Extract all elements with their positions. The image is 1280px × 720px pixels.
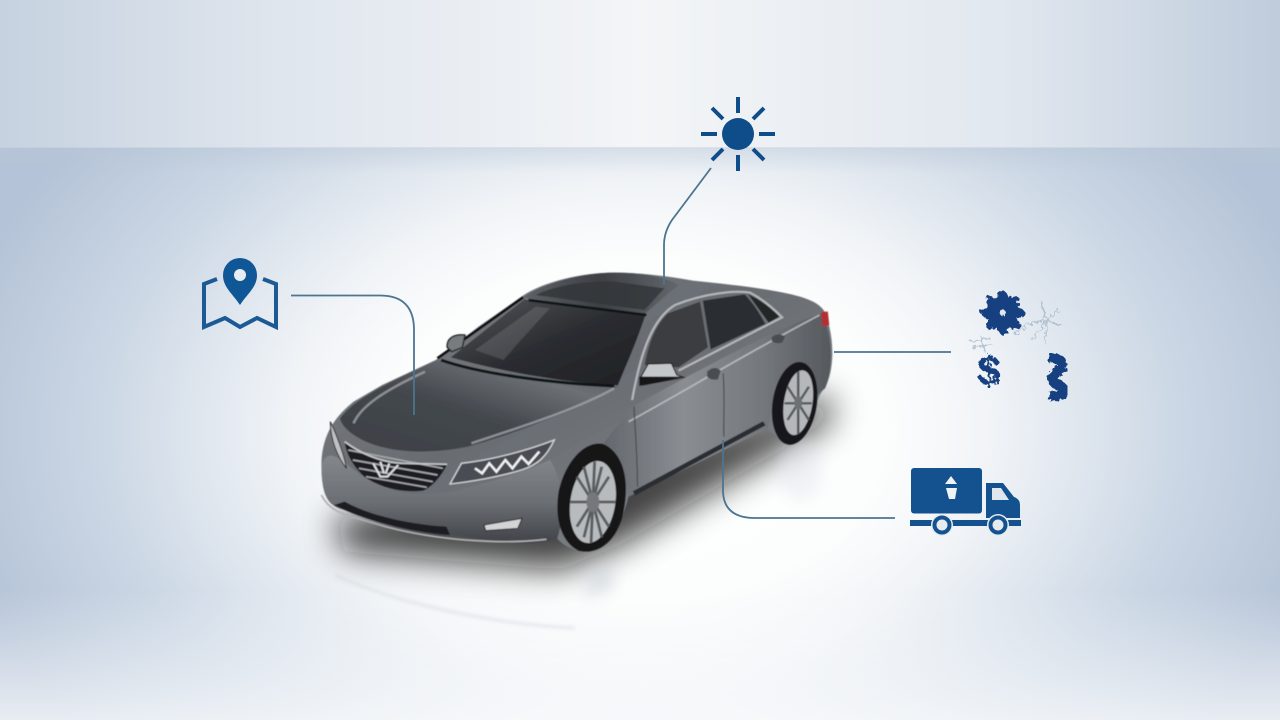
icon: scattered particles and dollar signs	[970, 291, 1064, 396]
particle cluster: dark	[981, 291, 1025, 335]
background: floor	[0, 147, 1280, 720]
connector: car to scatter icons	[834, 351, 951, 353]
dollar sign: $	[977, 347, 1001, 394]
car: tail light	[821, 312, 829, 327]
car: body shell	[321, 273, 832, 552]
car: side mirror right	[641, 363, 684, 385]
car: left headlight	[330, 422, 346, 468]
truck cargo symbol	[945, 476, 957, 499]
car: rear wheel	[766, 359, 823, 447]
car: side panel	[604, 313, 831, 497]
car: windshield	[451, 299, 646, 385]
car: right headlight	[450, 440, 554, 484]
connector: sun to roof	[664, 168, 711, 285]
dollar-like cluster	[1048, 358, 1064, 396]
particle cluster: faint	[970, 300, 1062, 352]
icon: map with pin	[204, 258, 276, 327]
car: hood highlight	[354, 372, 614, 443]
car: body crease lines	[629, 315, 820, 422]
car: fog light	[484, 518, 522, 531]
car: window chrome	[632, 292, 782, 400]
car: hood	[340, 360, 618, 452]
car	[321, 273, 832, 552]
icon: delivery truck	[910, 468, 1021, 536]
car: lower grille	[334, 502, 450, 535]
connector: door to truck	[723, 440, 895, 518]
car: front wheel	[557, 443, 626, 552]
car shadow and reflection	[332, 395, 832, 628]
connector: map to hood	[291, 296, 414, 415]
car: lower lip	[321, 495, 546, 542]
car: grille badge	[373, 462, 398, 477]
icon: sun	[701, 97, 775, 171]
car: front bumper	[321, 456, 562, 543]
car: side mirror left	[447, 335, 465, 352]
car: grille	[345, 442, 447, 491]
car: side windows	[645, 294, 779, 367]
car: roof with sunroof	[523, 273, 679, 314]
background: upper wall	[0, 0, 1280, 148]
car: door handles	[707, 334, 785, 380]
